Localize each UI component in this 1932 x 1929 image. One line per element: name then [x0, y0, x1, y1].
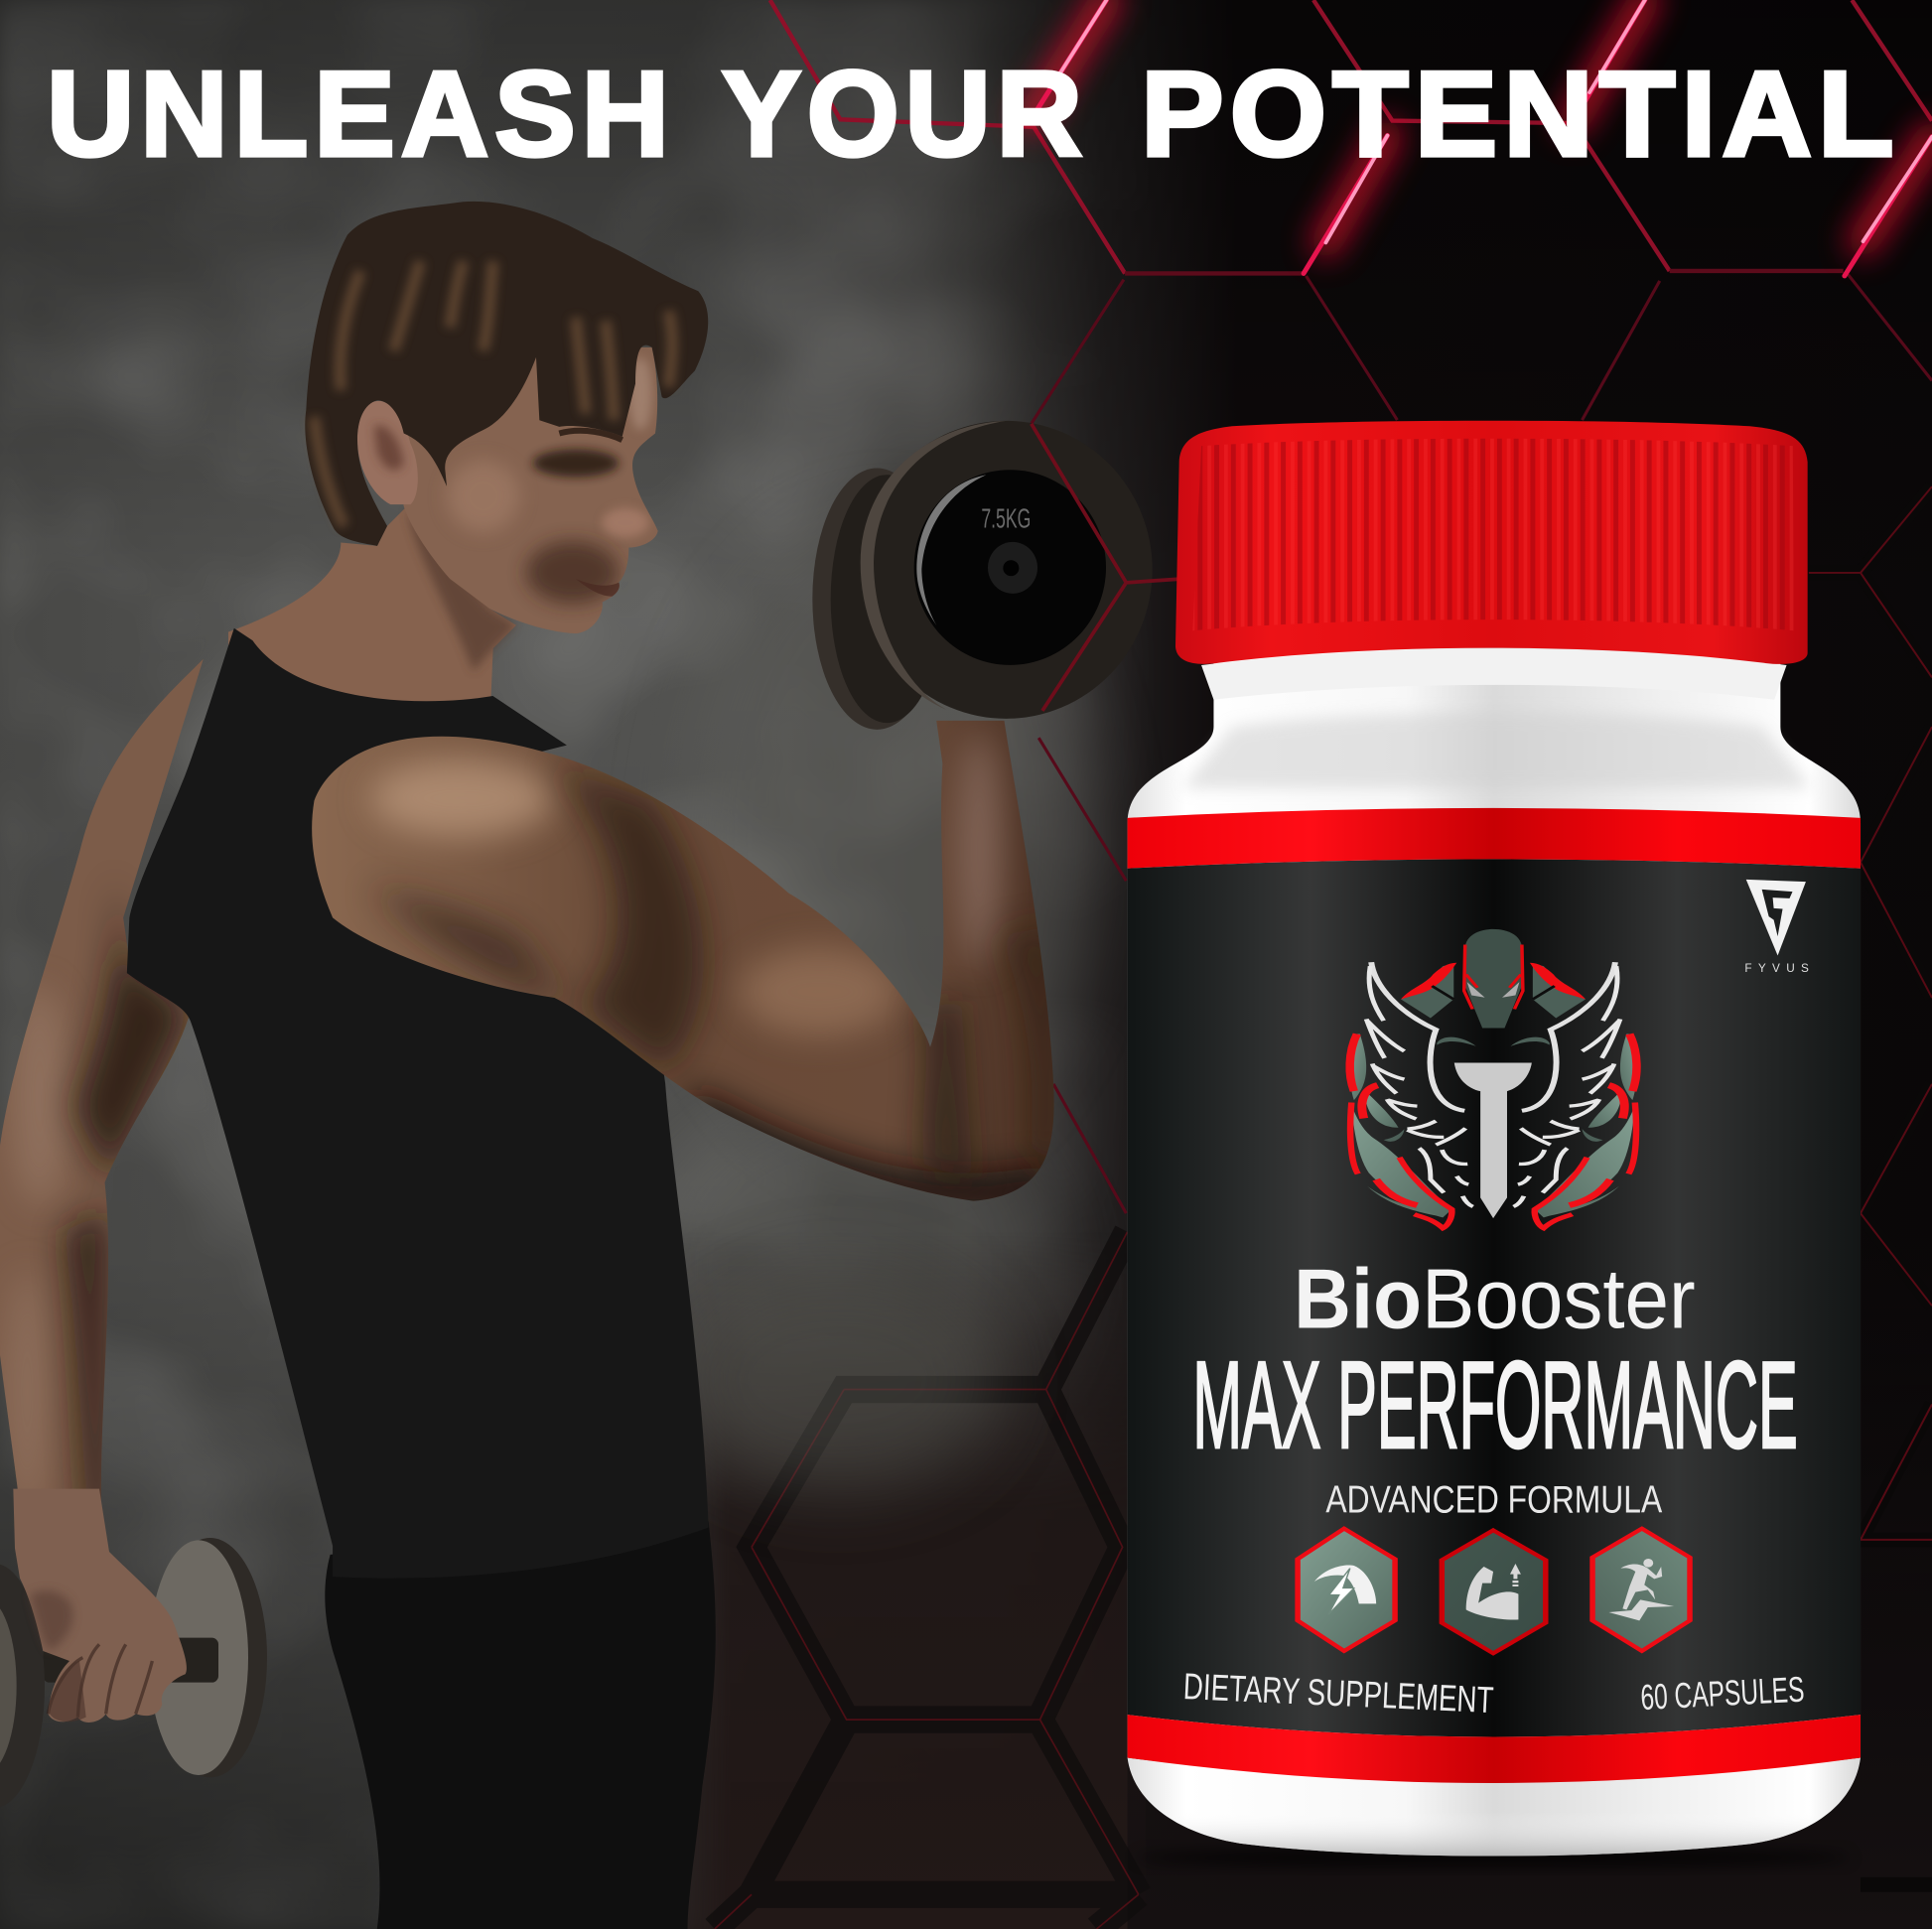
title: UNLEASH — [47, 46, 675, 181]
icon: energy arc with lightning — [1298, 1529, 1395, 1651]
background: smoky dark studio — [0, 0, 1180, 1929]
emblem and brand mark — [1349, 880, 1806, 1228]
lower dumbbell — [0, 1538, 267, 1808]
emblem sword — [1454, 1062, 1532, 1218]
emblem head — [1464, 929, 1523, 1028]
formula line: ADVANCED FORMULA — [1325, 1479, 1662, 1522]
lower red band — [1128, 1715, 1861, 1783]
ear — [357, 401, 418, 504]
brand name: FYVUS — [1744, 962, 1809, 975]
title: YOUR — [722, 46, 1088, 181]
emblem: winged warrior — [1349, 929, 1637, 1228]
left arm shading — [6, 901, 189, 1501]
bottle base — [1128, 1758, 1861, 1856]
upper red band — [1128, 808, 1861, 869]
arm shading — [369, 733, 1059, 1213]
shorts — [325, 1521, 716, 1929]
supplement bottle — [1128, 421, 1861, 1867]
rear plate — [812, 469, 941, 730]
product name: BioBooster — [1294, 1252, 1696, 1347]
front plate — [860, 421, 1153, 719]
bottle neck and shoulder — [1128, 646, 1861, 1758]
tank top — [127, 628, 709, 1579]
flexed arm — [312, 721, 1054, 1201]
icon: flexed bicep with up arrow — [1442, 1530, 1546, 1653]
left arm and back — [0, 659, 204, 1589]
dumbbell far plate — [153, 1538, 267, 1777]
center plate — [914, 470, 1106, 665]
title: POTENTIAL — [1141, 46, 1900, 181]
dietary supplement label: DIETARY SUPPLEMENT — [1182, 1665, 1494, 1721]
icon: runner on steps — [1592, 1529, 1690, 1651]
head in profile — [305, 202, 708, 633]
face shading — [447, 357, 652, 604]
hair highlights — [315, 261, 672, 526]
upper dumbbell — [812, 421, 1153, 730]
bottle shadow — [1136, 1848, 1851, 1867]
emblem right half, mirrored — [1510, 962, 1637, 1228]
title — [47, 46, 1900, 181]
background: lower hexagon cells — [592, 486, 1932, 1929]
black label — [1128, 859, 1861, 1736]
neck ring — [1201, 648, 1787, 700]
capsule count label: 60 CAPSULES — [1639, 1669, 1805, 1718]
background: glowing pink hexagon edges — [1033, 0, 1932, 276]
hair — [305, 202, 708, 546]
benefit icons — [1298, 1529, 1690, 1653]
athlete — [0, 202, 1059, 1929]
dumbbell handle — [43, 1638, 218, 1683]
dumbbell near plate — [0, 1564, 45, 1808]
background: hexagon grid lines — [770, 0, 1932, 1540]
hand with fingers — [13, 1489, 187, 1722]
neck shading — [1182, 713, 1811, 788]
neck — [228, 506, 516, 725]
brand mark triangle — [1746, 880, 1806, 955]
hexagon lines crossing the plate — [1032, 424, 1180, 711]
screw cap — [1175, 421, 1808, 664]
emblem left half — [1349, 962, 1476, 1228]
face — [390, 344, 658, 633]
plate weight marking: 7.5KG — [981, 503, 1031, 534]
